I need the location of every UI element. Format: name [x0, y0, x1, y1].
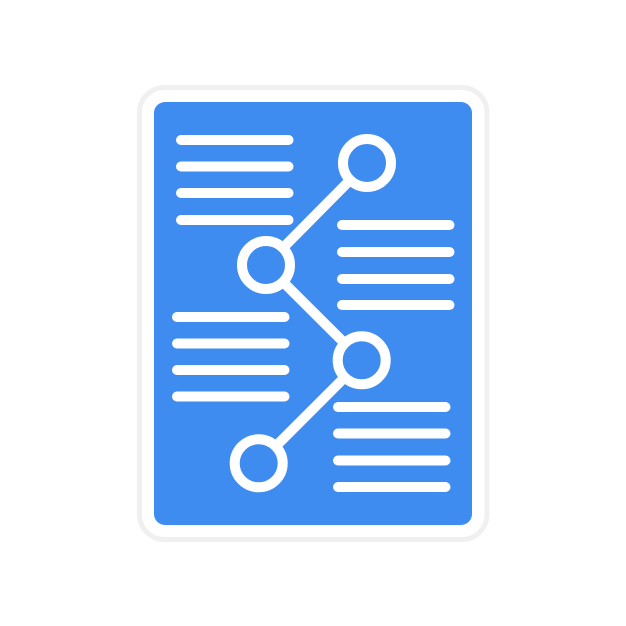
text block: top left — [176, 135, 294, 225]
timeline node 2 — [242, 241, 290, 289]
timeline node 3 — [338, 336, 386, 384]
text block: bottom right — [333, 402, 450, 492]
sticker outline — [140, 88, 487, 540]
text block: lower left — [172, 312, 290, 402]
text block: upper right — [337, 220, 454, 310]
timeline connector — [259, 163, 367, 463]
timeline node 1 — [343, 139, 391, 187]
timeline node 4 — [235, 439, 283, 487]
panel: blue document — [154, 102, 472, 525]
